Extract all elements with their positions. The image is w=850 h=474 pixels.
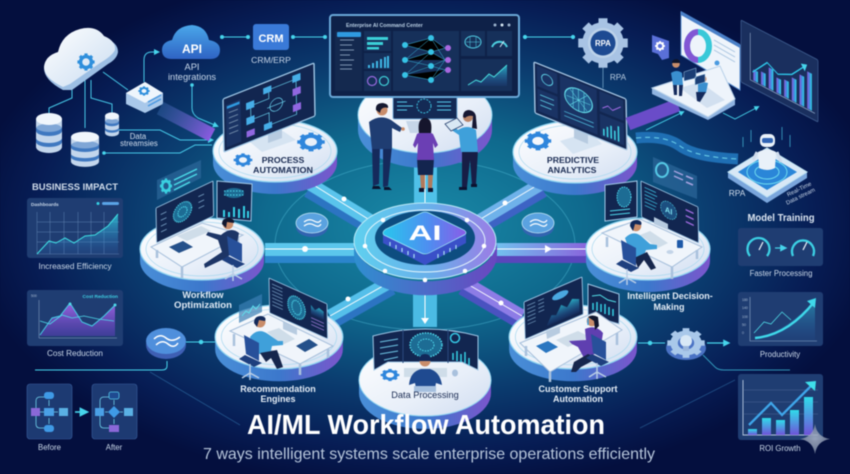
icon: CRM box	[253, 24, 289, 50]
spoke: upper left	[308, 184, 376, 228]
dark bar chart screen	[741, 20, 818, 122]
panel: customer support automation	[509, 277, 637, 404]
label: Engines	[260, 394, 296, 404]
label: Intelligent Decision-	[627, 291, 713, 301]
data streams label: Data	[130, 132, 147, 141]
panel: enterprise command center screen	[330, 15, 519, 97]
spokes connecting hub to capabilities	[265, 160, 590, 327]
icon: CRM box: CRM	[258, 33, 284, 45]
icon: big gear	[297, 133, 325, 151]
spoke: top	[414, 160, 437, 210]
label	[538, 384, 618, 404]
label: PREDICTIVE	[547, 155, 599, 165]
data streams label: streamsies	[120, 139, 158, 148]
label	[547, 155, 599, 175]
icon: settings chat bubble	[652, 35, 669, 60]
woman in purple	[413, 118, 438, 192]
operator seen from behind	[409, 354, 442, 392]
chart: dashboards	[27, 198, 123, 258]
command center title: Enterprise AI Command Center	[346, 23, 423, 29]
chart: productivity: 100	[742, 315, 748, 319]
brain panel	[461, 31, 485, 56]
spoke: upper right	[474, 183, 543, 228]
panel: gauges	[738, 228, 823, 266]
icon: AI chip	[383, 212, 466, 265]
small console monitor	[393, 96, 457, 133]
chart: productivity	[738, 292, 823, 346]
API integrations label: API	[184, 62, 200, 72]
icon: API cloud: API	[182, 42, 202, 56]
label	[240, 384, 316, 404]
icon: small gear	[234, 153, 252, 167]
label	[253, 155, 313, 175]
RPA label: RPA	[610, 73, 627, 82]
heading: BUSINESS IMPACT	[32, 182, 119, 192]
label	[174, 290, 232, 310]
robot on pad	[728, 127, 807, 203]
spoke: right	[490, 243, 590, 263]
CRM/ERP label: CRM/ERP	[251, 55, 291, 65]
label: Before	[38, 443, 61, 452]
wave data stream	[636, 137, 738, 159]
monitor	[269, 278, 328, 339]
chip label: AI	[408, 222, 442, 245]
chart: cost reduction	[27, 290, 123, 346]
label: ANALYTICS	[548, 165, 597, 175]
standing analyst	[671, 59, 683, 96]
chart: cost reduction: Cost Reduction	[83, 294, 118, 300]
connector: disc to gear	[638, 341, 790, 370]
progress panel	[364, 31, 391, 51]
left column: business impact	[27, 182, 215, 452]
main monitor: AI	[665, 205, 672, 217]
seated analyst	[696, 76, 708, 102]
real-time stream label: Data stream	[785, 187, 817, 207]
icon: cloud with gear	[44, 28, 118, 90]
real-time stream label	[782, 181, 817, 207]
label: Customer Support	[538, 384, 618, 394]
spoke: lower left	[330, 282, 392, 322]
connector: command center to RPA	[523, 35, 575, 39]
chart: dashboards: Dashboards	[31, 202, 59, 208]
panel: after flow	[92, 384, 137, 439]
RPA pad label: RPA	[729, 188, 746, 198]
label: Faster Processing	[750, 269, 812, 278]
gauges panel	[364, 71, 391, 91]
panel: recommendation engines	[215, 278, 343, 404]
connector: coin to disc	[35, 340, 215, 370]
icon: server cube	[126, 82, 163, 113]
thin connectors	[646, 107, 758, 130]
panel: data processing	[359, 329, 491, 429]
right column: outcomes	[638, 213, 830, 454]
icon: small coin left	[296, 213, 328, 237]
robot	[753, 134, 781, 170]
label: Data Processing	[391, 390, 459, 400]
icon: database middle	[71, 132, 99, 167]
icon: bulb gear	[666, 328, 706, 360]
connector lines	[49, 52, 217, 153]
main monitor	[156, 181, 214, 243]
desk	[520, 312, 622, 382]
icon: gear	[381, 369, 399, 381]
person at desk	[616, 220, 657, 285]
spoke: lower right	[462, 282, 522, 322]
floating card	[653, 157, 697, 199]
top platform: command center	[358, 77, 492, 168]
agent with headset	[569, 316, 609, 379]
title block	[203, 409, 655, 463]
real-time stream label: Real-Time	[786, 181, 813, 198]
panel: predictive analytics	[513, 62, 637, 195]
chart: productivity: 50	[742, 323, 746, 327]
icon: gear	[525, 132, 551, 150]
label: Increased Efficiency	[38, 262, 112, 271]
keyboard	[404, 368, 447, 377]
main monitor	[524, 277, 583, 339]
main monitor	[641, 181, 699, 243]
man in suit	[369, 103, 405, 190]
icon: mouse	[452, 370, 458, 376]
woman with tablet	[445, 110, 478, 190]
bars panel	[364, 53, 391, 69]
label: Cost Reduction	[47, 349, 103, 358]
secondary monitor	[217, 181, 252, 221]
isometric platform with team	[652, 59, 735, 120]
label: PROCESS	[262, 155, 304, 165]
secondary monitor	[605, 181, 637, 221]
panel: intelligent decision-making	[586, 157, 713, 312]
label: Productivity	[760, 350, 800, 359]
label: Recommendation	[240, 384, 316, 394]
top-left data infrastructure	[36, 24, 326, 167]
chart: ROI growth	[738, 374, 823, 440]
neural network panel	[393, 31, 459, 91]
title: AI/ML Workflow Automation	[247, 409, 605, 440]
orbit lines	[150, 160, 735, 428]
floating chart	[239, 294, 262, 323]
team of people at the console	[369, 103, 478, 192]
icon: predictive monitor	[534, 62, 627, 154]
secondary monitor	[588, 284, 619, 324]
model training heading: Model Training	[748, 213, 815, 224]
chart: productivity: 180	[742, 298, 748, 302]
label: After	[106, 443, 123, 452]
icon: RPA gear	[578, 18, 628, 88]
gauge panel	[487, 31, 512, 56]
label: Workflow	[182, 290, 224, 300]
chart: productivity: 0	[742, 331, 744, 335]
icon: small coin right	[522, 213, 554, 237]
arrow: before to after	[75, 411, 86, 413]
curved monitors	[373, 329, 478, 370]
chart: productivity: 140	[742, 306, 748, 310]
wave stream centre dashes	[636, 137, 738, 159]
purple data beam	[628, 105, 678, 124]
label: Automation	[553, 394, 603, 404]
icon: database large	[36, 113, 62, 153]
icon: process monitor	[223, 63, 315, 152]
connector: CRM to command center	[292, 36, 326, 38]
white presentation screen	[681, 11, 740, 90]
person at desk	[204, 218, 245, 281]
spoke: bottom	[413, 285, 437, 327]
label	[627, 291, 713, 312]
subtitle: 7 ways intelligent systems scale enterprise operations efficiently	[203, 446, 655, 463]
panel: workflow optimization	[140, 160, 264, 310]
label: AUTOMATION	[253, 165, 313, 175]
icon: RPA gear: RPA	[595, 39, 611, 48]
floating status card	[157, 160, 201, 200]
spoke: left	[265, 243, 360, 263]
desk	[602, 217, 702, 279]
label: ROI Growth	[759, 444, 801, 453]
purple data beam	[160, 108, 212, 135]
person at desk	[239, 316, 283, 380]
panel: process automation	[213, 63, 337, 194]
central AI hub	[354, 203, 497, 295]
icon: stream coin	[146, 328, 186, 359]
chart: cost reduction: 500	[31, 294, 37, 298]
connector: API to CRM	[220, 36, 250, 38]
sidebar	[335, 31, 362, 91]
icon: API cloud	[162, 25, 220, 59]
label: Making	[653, 302, 685, 312]
panel: before flow	[27, 384, 72, 439]
API integrations label	[168, 62, 216, 82]
desk	[151, 223, 243, 278]
API integrations label: integrations	[168, 72, 216, 82]
icon: sparkle	[800, 424, 830, 454]
laptops	[684, 68, 705, 85]
line chart panel	[461, 59, 512, 91]
desk	[230, 314, 333, 375]
data streams label	[120, 132, 158, 148]
icon: database small	[105, 112, 119, 136]
label: Optimization	[174, 300, 232, 310]
top right: RPA and analytics scene	[523, 11, 818, 207]
